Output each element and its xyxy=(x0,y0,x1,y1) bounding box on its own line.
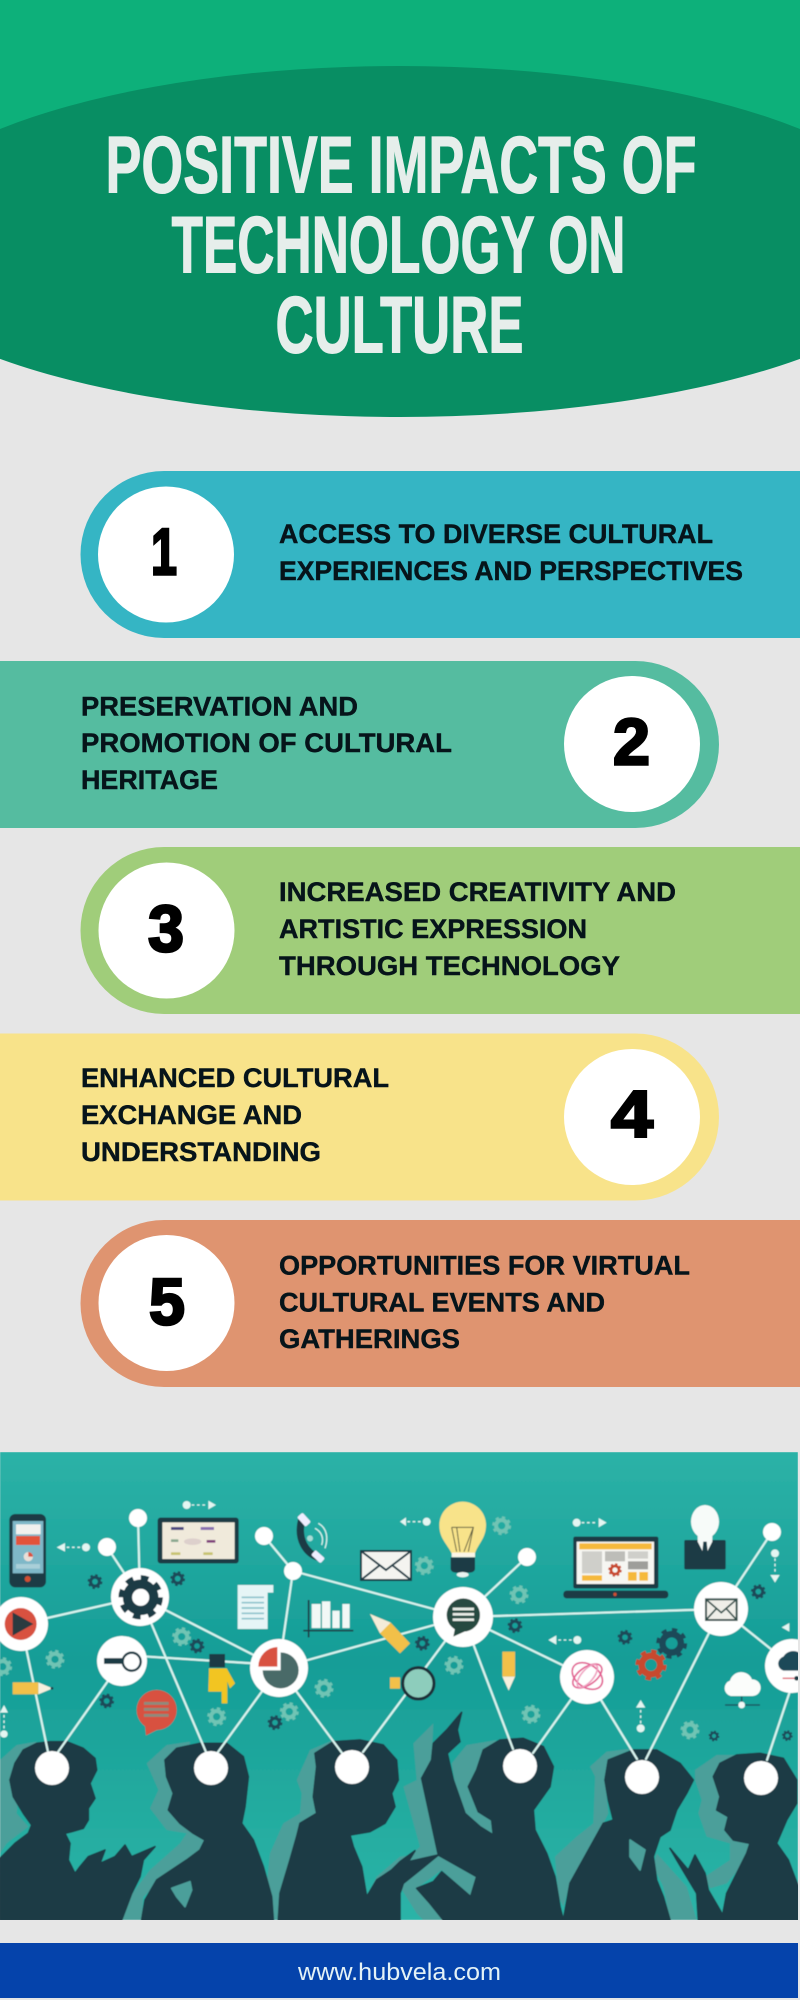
panel: item 1: EXPERIENCES AND PERSPECTIVES xyxy=(279,556,743,586)
icon: speech bubble xyxy=(137,1690,177,1735)
title xyxy=(106,120,696,370)
icon: cloud node xyxy=(778,1651,800,1681)
icon: smartphone xyxy=(9,1514,46,1587)
title ellipse xyxy=(0,66,800,417)
footer url: www.hubvela.com xyxy=(297,1959,501,1986)
head nodes xyxy=(35,1749,778,1795)
icon: pink swirl xyxy=(570,1661,604,1691)
panel: item 5 xyxy=(81,1220,800,1387)
panel: item 1 xyxy=(81,471,800,638)
panel: item 5: GATHERINGS xyxy=(279,1324,460,1354)
icons: left half xyxy=(0,1501,411,1738)
panel: item 2: HERITAGE xyxy=(81,765,218,795)
icon: laptop xyxy=(563,1537,668,1598)
panel: item 4: EXCHANGE AND xyxy=(81,1100,302,1130)
panel: item 5: OPPORTUNITIES FOR VIRTUAL xyxy=(279,1250,690,1280)
panel: item 2: PRESERVATION AND xyxy=(81,692,358,722)
panel: item 3: 3 xyxy=(148,892,184,966)
icon: small gears xyxy=(0,1572,332,1729)
header band xyxy=(0,0,800,240)
icon: document xyxy=(238,1585,273,1629)
panel: item 4: 4 xyxy=(611,1077,653,1151)
icons: right half xyxy=(390,1502,800,1741)
icon: pie chart xyxy=(258,1647,299,1688)
title: CULTURE xyxy=(276,280,524,370)
icon: pointing hand xyxy=(208,1654,235,1703)
panel: item 2 xyxy=(0,661,719,828)
icon: pencil vertical xyxy=(502,1652,515,1691)
icon: gears xyxy=(416,1517,792,1741)
panel: item 1: 1 xyxy=(151,515,177,589)
icon: envelope node xyxy=(706,1599,737,1620)
icon: pencil diagonal xyxy=(370,1614,410,1653)
panel: item 2: 2 xyxy=(613,705,650,779)
illustration: connected people and technology xyxy=(0,1452,800,1920)
panel: item 3: THROUGH TECHNOLOGY xyxy=(279,951,620,981)
icon: telephone handset xyxy=(297,1513,327,1563)
icon: magnifier ring xyxy=(390,1668,434,1699)
panel: item 4 xyxy=(0,1034,719,1200)
panel: item 3: ARTISTIC EXPRESSION xyxy=(279,914,587,944)
icon: hub gear xyxy=(121,1578,160,1617)
panel: item 3 xyxy=(81,847,800,1014)
panel: item 5: 5 xyxy=(149,1265,185,1339)
network nodes xyxy=(0,1509,800,1704)
icon: tablet xyxy=(158,1518,239,1563)
icon: chat node xyxy=(447,1598,480,1637)
silhouette shadows xyxy=(0,1740,423,1920)
icon: pencil horizontal xyxy=(13,1682,53,1694)
panel: item 3: INCREASED CREATIVITY AND xyxy=(279,877,676,907)
icon: envelope xyxy=(361,1551,411,1580)
icon: bar chart xyxy=(303,1600,353,1637)
footer bar xyxy=(0,1943,798,1998)
icon: play button xyxy=(5,1608,37,1640)
icon: magnifier xyxy=(104,1653,141,1671)
icon: light bulb xyxy=(439,1502,486,1577)
icon: businessman xyxy=(684,1505,726,1569)
panel: item 5: CULTURAL EVENTS AND xyxy=(279,1288,605,1318)
panel: item 2: PROMOTION OF CULTURAL xyxy=(81,728,452,758)
network lines xyxy=(21,1518,797,1760)
silhouettes: people xyxy=(0,1740,438,1920)
panel: item 4: ENHANCED CULTURAL xyxy=(81,1063,389,1093)
icon: cloud xyxy=(725,1672,761,1708)
icon: dotted arrows xyxy=(0,1501,216,1738)
panel: item 1: ACCESS TO DIVERSE CULTURAL xyxy=(279,519,713,549)
icon: dotted arrows xyxy=(400,1517,789,1732)
panel: item 4: UNDERSTANDING xyxy=(81,1137,321,1167)
